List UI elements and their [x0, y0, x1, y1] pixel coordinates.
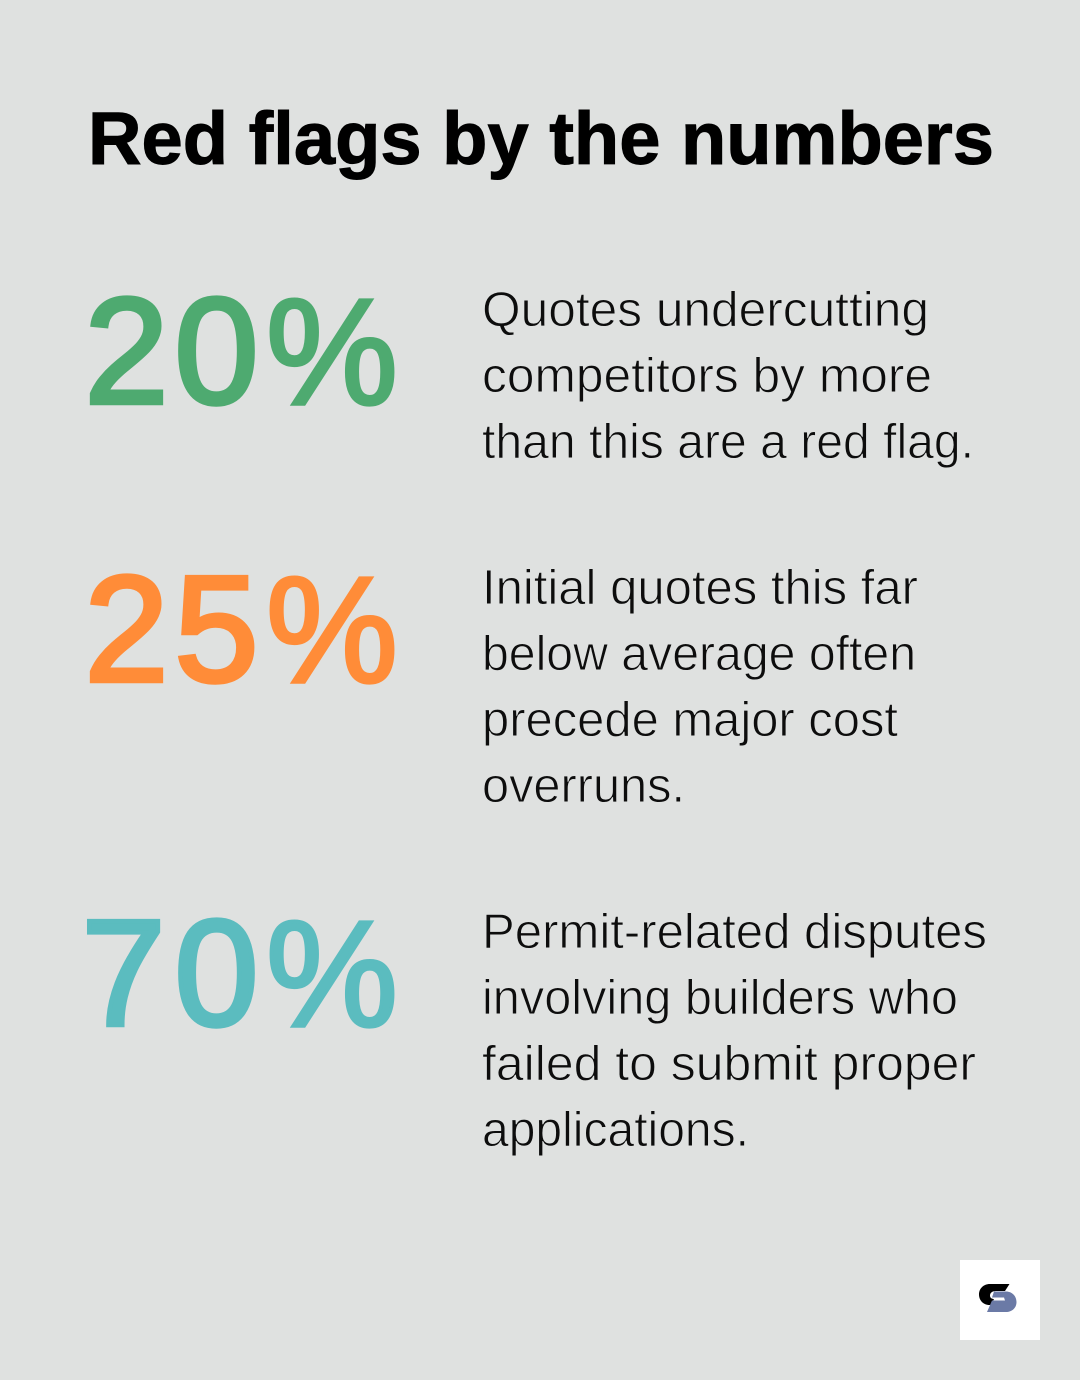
logo badge: [960, 1260, 1040, 1340]
stat value: 70%: [82, 888, 398, 1058]
stat value: 25%: [84, 544, 398, 714]
stat value: 70%: 70: [82, 888, 258, 1057]
stat description: initial quotes below average: [482, 561, 918, 813]
stat value: 20%: [84, 266, 398, 436]
stat description: initial quotes below average: precede major cost: [482, 693, 898, 747]
stat value: 25%: 25: [84, 544, 258, 713]
stat value: 70%: %: [266, 889, 398, 1058]
stat description: initial quotes below average: below average often: [482, 627, 916, 681]
logo mark: blue swoosh: [987, 1292, 1016, 1312]
stat row: 25%: [84, 544, 918, 813]
stat description: permit-related disputes: involving builders who: [482, 971, 958, 1025]
stat value: 20%: 20: [84, 266, 258, 435]
stat row: 20%: [84, 266, 974, 469]
stat description: permit-related disputes: [482, 905, 987, 1157]
stat row: 70%: [82, 888, 987, 1157]
stat value: 25%: %: [266, 545, 398, 714]
stat description: initial quotes below average: overruns.: [482, 759, 685, 813]
stat description: permit-related disputes: failed to submit proper: [482, 1037, 976, 1091]
stat value: 20%: %: [266, 267, 398, 436]
stat description: quotes undercutting competitors: competitors by more: [482, 349, 932, 403]
stat description: quotes undercutting competitors: Quotes undercutting: [482, 283, 929, 337]
stat description: initial quotes below average: Initial quotes this far: [482, 561, 918, 615]
stat description: quotes undercutting competitors: [482, 283, 974, 469]
logo mark: black swoosh: [979, 1284, 1010, 1305]
stat description: permit-related disputes: Permit-related disputes: [482, 905, 987, 959]
stat description: permit-related disputes: applications.: [482, 1103, 749, 1157]
stat description: quotes undercutting competitors: than this are a red flag.: [482, 415, 974, 469]
title: Red flags by the numbers: [88, 97, 994, 180]
